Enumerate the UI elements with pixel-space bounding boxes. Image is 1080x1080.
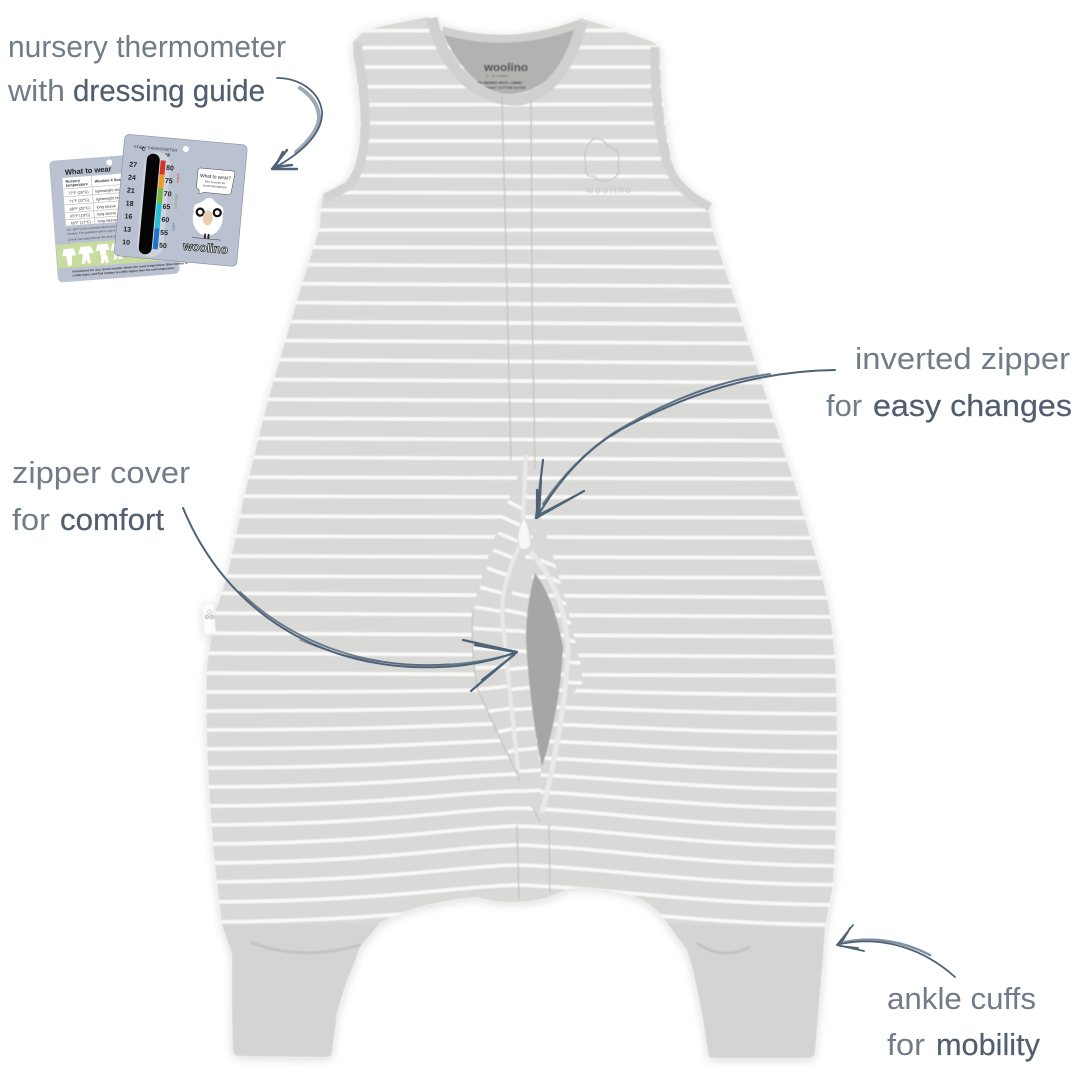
temperature scales: °F	[165, 153, 171, 159]
card: what to wear guide (back): long sleeve	[97, 211, 116, 217]
card: what to wear guide (back): 65 - 80°F is the recommended nursery	[67, 224, 119, 232]
temperature scales	[122, 146, 176, 250]
temperature scales: 60	[161, 217, 170, 224]
card: what to wear guide (back): Woolino 4 Season	[95, 177, 128, 184]
card: what to wear guide (back): temperature	[66, 182, 88, 188]
card: what to wear guide (back): 65°F (18°C)	[70, 213, 91, 219]
temperature scales: 13	[123, 226, 131, 234]
zipper tapes and pull	[502, 455, 568, 813]
zipper opening: dark lining	[526, 573, 563, 767]
neck interior with label: 100% ORGANIC COTTON OUTER	[470, 86, 526, 90]
callout text: nursery thermometer with dressing guide: with	[7, 73, 65, 108]
body fabric	[206, 17, 837, 928]
callout text: ankle cuffs for mobility	[887, 981, 1040, 1062]
temperature scales: 10	[122, 239, 130, 247]
callout text: ankle cuffs for mobility: ankle cuffs	[887, 981, 1036, 1016]
woolino logo: woolino	[181, 239, 229, 257]
thermometer strip	[136, 151, 171, 258]
temperature scales: °C	[139, 146, 146, 153]
card: what to wear guide (back): lightweight short	[96, 195, 124, 202]
thermometer cards	[49, 134, 247, 283]
neck interior with label: 6 - 18 months	[486, 74, 508, 78]
callout text: zipper cover for comfort: comfort	[60, 502, 164, 537]
temperature scales: 27	[129, 162, 137, 169]
temperature scales: 21	[127, 187, 135, 195]
card: what to wear guide (back): long sleeve	[96, 204, 116, 210]
arrow: to inverted zipper	[536, 370, 835, 518]
armhole bindings	[325, 42, 710, 207]
speech bubble: See reverse for	[205, 179, 225, 185]
callout text: ankle cuffs for mobility: mobility	[936, 1027, 1040, 1062]
callout text: inverted zipper for easy changes	[826, 341, 1072, 423]
callout text: nursery thermometer with dressing guide	[7, 29, 286, 108]
arrow: to thermometer cards	[272, 78, 322, 169]
callout text: inverted zipper for easy changes: for	[826, 388, 862, 423]
temperature scales: 18	[125, 200, 134, 208]
callout text: ankle cuffs for mobility: for	[887, 1027, 925, 1062]
speech bubble: recommendations	[203, 183, 227, 189]
card: room thermometer (front)	[114, 134, 247, 267]
zipper opening: inner panel	[504, 554, 542, 811]
collar	[432, 18, 582, 100]
card: what to wear guide (back): Check your baby behind the neck or	[68, 234, 116, 242]
temperature scales: 50	[159, 243, 167, 250]
card: what to wear guide (back): 68°F (20°C)	[70, 206, 91, 212]
callout text: zipper cover for comfort: zipper cover	[12, 455, 190, 490]
white stripes	[190, 30, 850, 925]
temperature scales: 55	[160, 230, 168, 237]
side tag	[203, 603, 216, 635]
neck interior with label	[443, 28, 575, 94]
temperature scales: 16	[124, 213, 133, 221]
callout text: zipper cover for comfort: for	[12, 502, 50, 537]
chest logo embroidery: woolino	[585, 185, 631, 196]
callout text: nursery thermometer with dressing guide: nursery thermometer	[8, 29, 286, 64]
card: what to wear guide (back): Instructions for use: Green number shows the room temperature. Blue number is	[72, 261, 188, 274]
card: what to wear guide (back): 71°F (22°C)	[69, 198, 90, 204]
card: what to wear guide (back): 63°F (17°C)	[71, 220, 92, 226]
temperature scales: 75	[165, 178, 173, 186]
temperature scales: 80	[166, 165, 174, 173]
card: what to wear guide (back): long sleeve	[98, 218, 117, 224]
scale side labels: cold	[170, 223, 176, 231]
scale side labels: warm	[175, 172, 181, 183]
card: room thermometer (front): ROOM THERMOMETER	[134, 144, 178, 153]
callout text: zipper cover for comfort	[12, 455, 190, 537]
zipper opening: left flap	[470, 455, 540, 822]
placket seams	[502, 95, 550, 900]
card: what to wear guide (back): lightweight short	[95, 187, 124, 194]
card: what to wear guide (back)	[49, 151, 189, 283]
card: what to wear guide (back): Nursery	[65, 179, 81, 184]
speech bubble	[196, 168, 235, 197]
temperature scales: 70	[163, 191, 172, 198]
left ankle cuff	[222, 923, 380, 1057]
arrow: to ankle cuffs	[837, 925, 955, 977]
callout text: inverted zipper for easy changes: easy changes	[873, 388, 1072, 423]
neck interior with label: woolino	[483, 62, 528, 74]
scale side labels	[170, 172, 181, 231]
callout text: nursery thermometer with dressing guide: dressing guide	[73, 73, 265, 108]
scale side labels: just right	[172, 193, 179, 210]
zipper opening: right flap	[532, 515, 583, 693]
speech bubble: What to wear?	[200, 173, 231, 182]
callout text: inverted zipper for easy changes: inverted zipper	[855, 341, 1070, 376]
temperature scales: 24	[128, 174, 136, 182]
card: what to wear guide (back): a little lower, and Red number is a little higher than the real temperature	[73, 266, 175, 278]
sleep bag garment	[190, 17, 850, 1058]
neck interior with label: 100% MERINO WOOL LINING	[474, 81, 523, 85]
card: what to wear guide (back): 77°F (25°C)	[68, 190, 89, 196]
arrow: to zipper cover	[183, 508, 517, 691]
sheep mascot	[191, 197, 224, 240]
temperature scales: 65	[162, 204, 171, 211]
card: what to wear guide (back): nursery. This guideline above may vary	[67, 228, 120, 236]
chest logo embroidery	[585, 139, 631, 196]
right ankle cuff	[667, 923, 825, 1058]
card: what to wear guide (back): What to wear	[65, 164, 112, 177]
